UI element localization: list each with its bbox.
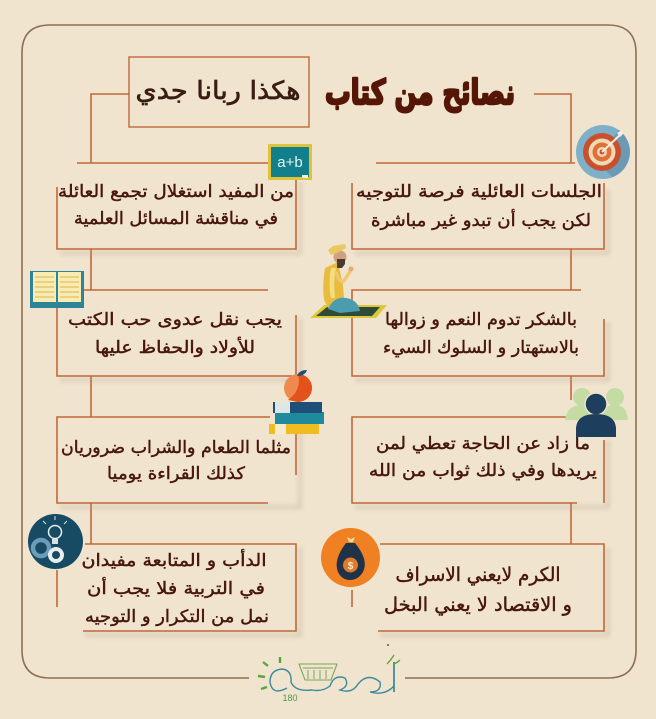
- panel: gratitude, right row 2: [352, 290, 608, 380]
- panel: generosity, right row 4: الكرم لايعني الاسراف: [396, 564, 560, 586]
- icon: lightbulb and gears: [28, 514, 83, 569]
- panel: gratitude, right row 2: بالشكر تدوم النعم و زوالها: [385, 310, 577, 330]
- panel: perseverance, left row 4: [57, 544, 300, 635]
- panel: giving surplus, right row 3: ما زاد عن الحاجة تعطي لمن: [376, 434, 590, 454]
- icon: open book: [30, 271, 84, 308]
- title: نصائح من كتاب: [325, 73, 515, 113]
- icon: money bag: [321, 528, 380, 587]
- panel: generosity, right row 4: [352, 544, 608, 635]
- icon: target: [576, 125, 630, 179]
- panel: reading daily, left row 3: كذلك القراءة يوميا: [107, 464, 246, 484]
- panel: family gatherings, left row 1: من المفيد استغلال تجمع العائلة: [58, 182, 294, 202]
- icon: chalkboard a+b: [268, 144, 312, 180]
- panel: family gatherings, left row 1: [57, 163, 300, 253]
- panel: perseverance, left row 4: الدأب و المتابعة مفيدان: [82, 549, 266, 571]
- panel: giving surplus, right row 3: [352, 417, 608, 507]
- icon: praying man on mat: [310, 244, 387, 318]
- panel: family sessions, right row 1: لكن يجب أن تبدو غير مباشرة: [371, 209, 591, 231]
- logo: 180: [282, 693, 298, 703]
- panel: generosity, right row 4: و الاقتصاد لا يعني البخل: [384, 594, 572, 616]
- panel: love of books, left row 2: يجب نقل عدوى حب الكتب: [68, 310, 282, 330]
- icon: group of people: [565, 388, 628, 437]
- panel: family sessions, right row 1: الجلسات العائلية فرصة للتوجيه: [356, 182, 602, 202]
- logo: [258, 644, 400, 703]
- icon: chalkboard a+b: a+b: [277, 154, 303, 171]
- panel: giving surplus, right row 3: يريدها وفي ذلك ثواب من الله: [369, 461, 597, 481]
- panel: love of books, left row 2: للأولاد والحفاظ عليها: [95, 337, 255, 358]
- panel: family sessions, right row 1: [352, 163, 608, 253]
- panel: perseverance, left row 4: نمل من التكرار و التوجيه: [85, 607, 269, 627]
- panel: perseverance, left row 4: في التربية فلا يجب أن: [87, 577, 265, 599]
- panel: reading daily, left row 3: مثلما الطعام والشراب ضروريان: [61, 438, 291, 458]
- connectors: [91, 94, 571, 544]
- panel: love of books, left row 2: [57, 290, 300, 380]
- icon: money bag: $: [348, 561, 354, 572]
- subtitle box: [129, 57, 309, 127]
- subtitle box: هكذا ربانا جدي: [136, 76, 300, 105]
- panel: family gatherings, left row 1: في مناقشة المسائل العلمية: [74, 209, 278, 229]
- panel: reading daily, left row 3: [57, 417, 300, 507]
- panel: gratitude, right row 2: بالاستهتار و السلوك السيء: [383, 338, 579, 358]
- icon: books and apple: [269, 370, 324, 434]
